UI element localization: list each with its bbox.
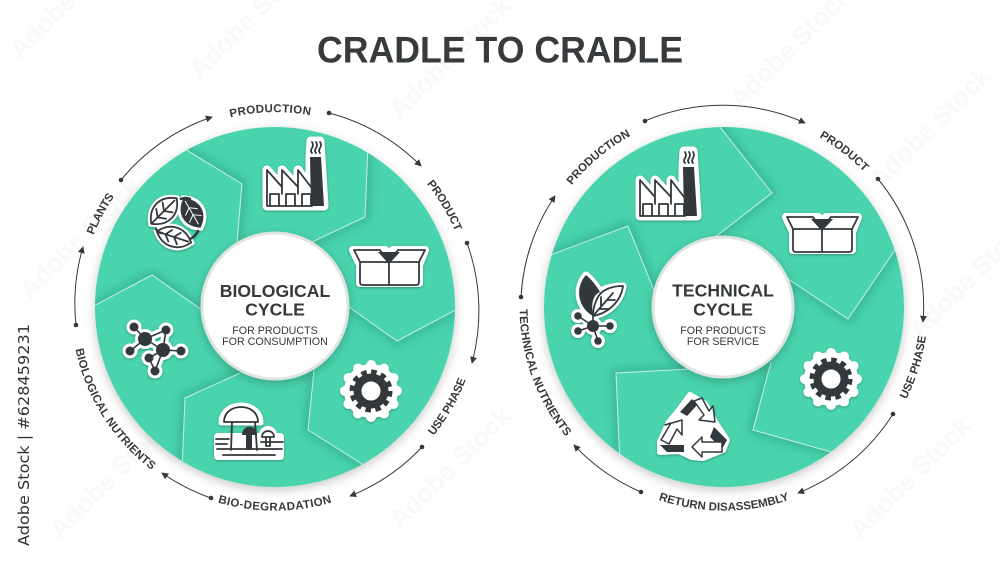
center heading: technical cycle: TECHNICAL [672,280,774,300]
icon: factory [640,151,697,216]
teal wheel: technical [544,127,904,487]
segment overlaps: technical [542,122,899,465]
icon: box [786,217,858,252]
side credit text: Adobe Stock | #628459231 [15,324,33,546]
center subtext: biological: FOR PRODUCTS [232,325,318,337]
icon: gear [344,364,398,418]
labels: technical: PRODUCTION [566,129,630,185]
arrows: biological [74,111,479,500]
labels: biological [74,104,466,511]
center subtext: technical: FOR SERVICE [687,336,759,348]
panel: biological cycle [74,104,480,511]
labels: biological: PLANTS [86,193,114,234]
labels: biological: BIO-DEGRADATION [218,495,331,511]
labels: technical: USE PHASE [900,336,926,398]
segment overlaps: biological [88,146,465,470]
center disc: biological [202,233,348,379]
icon: factory [267,141,324,206]
icon: recycle [660,395,727,458]
watermark: Adobe Stock [13,170,147,304]
watermark: Adobe Stock [863,60,997,194]
center disc: technical [653,237,793,377]
center heading: biological cycle: CYCLE [245,300,305,320]
labels: technical: PRODUCT [820,130,870,170]
center heading: technical cycle: CYCLE [693,300,753,320]
icon: box [353,250,425,285]
panel: technical cycle [518,104,927,511]
center subtext: technical: FOR PRODUCTS [680,325,766,337]
labels: biological: PRODUCTION [230,104,311,118]
labels: biological: BIOLOGICAL NUTRIENTS [74,307,198,494]
icon: plant with molecule [571,275,623,348]
labels: technical: TECHNICAL NUTRIENTS [520,309,571,436]
teal wheel: biological [95,127,455,487]
icon: molecule [122,320,188,378]
labels: biological: PRODUCT [427,180,462,230]
center heading: biological cycle: BIOLOGICAL [220,281,330,301]
arrows: technical [519,105,924,494]
title: CRADLE TO CRADLE [317,30,683,70]
center subtext: biological: FOR CONSUMPTION [222,336,328,348]
watermark: Adobe Stock [43,410,177,544]
icon: mushrooms [214,405,284,460]
labels: technical: RETURN DISASSEMBLY [659,492,787,511]
labels: biological: USE PHASE [428,378,466,434]
watermark: Adobe Stock [383,400,517,534]
icon: three leaves [144,191,210,252]
icon: gear [804,352,858,406]
labels: technical [520,129,926,511]
watermark: Adobe Stock [843,410,977,544]
